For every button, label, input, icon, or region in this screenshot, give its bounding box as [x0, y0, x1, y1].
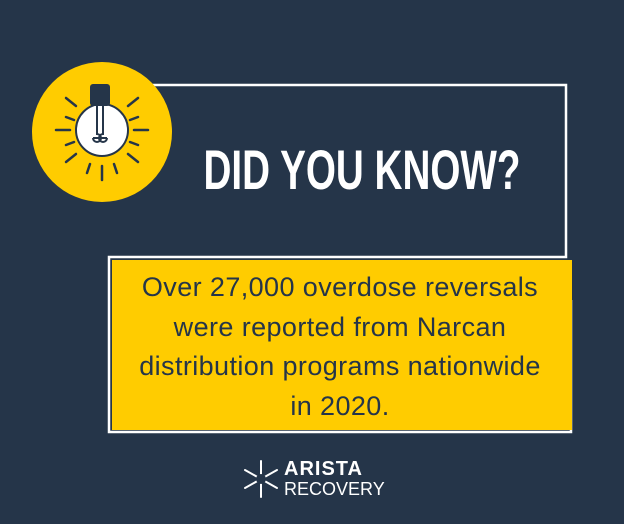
logo — [244, 458, 385, 499]
yellow fact box — [112, 260, 572, 430]
icon: logo mark — [244, 460, 278, 498]
logo: RECOVERY — [284, 479, 385, 499]
fact text: were reported from Narcan — [174, 312, 506, 342]
fact text: in 2020. — [290, 390, 390, 420]
title: DID YOU KNOW? — [204, 138, 520, 201]
fact text: Over 27,000 overdose reversals — [142, 272, 538, 302]
fact text: distribution programs nationwide — [139, 351, 541, 381]
fact text — [139, 272, 541, 420]
icon: lightbulb — [32, 62, 172, 202]
logo text: ARISTA — [284, 458, 363, 480]
